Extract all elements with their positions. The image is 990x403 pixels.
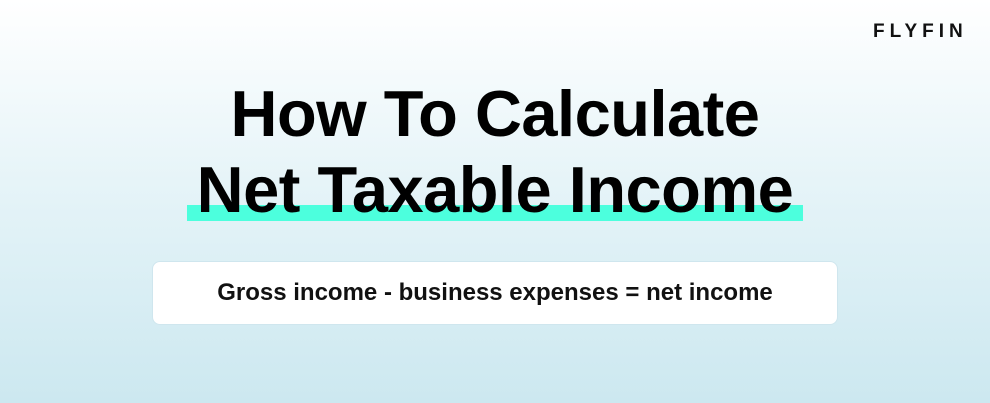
title line 1: How To Calculate [231,77,759,150]
highlight bar [187,205,803,221]
formula box [152,261,838,325]
title line 2 text: Net Taxable Income [197,153,793,226]
formula box: Gross income - business expenses = net income [217,279,773,306]
logo: FLYFIN: FLYFIN [873,21,968,42]
title line 2 with highlight [187,153,803,226]
